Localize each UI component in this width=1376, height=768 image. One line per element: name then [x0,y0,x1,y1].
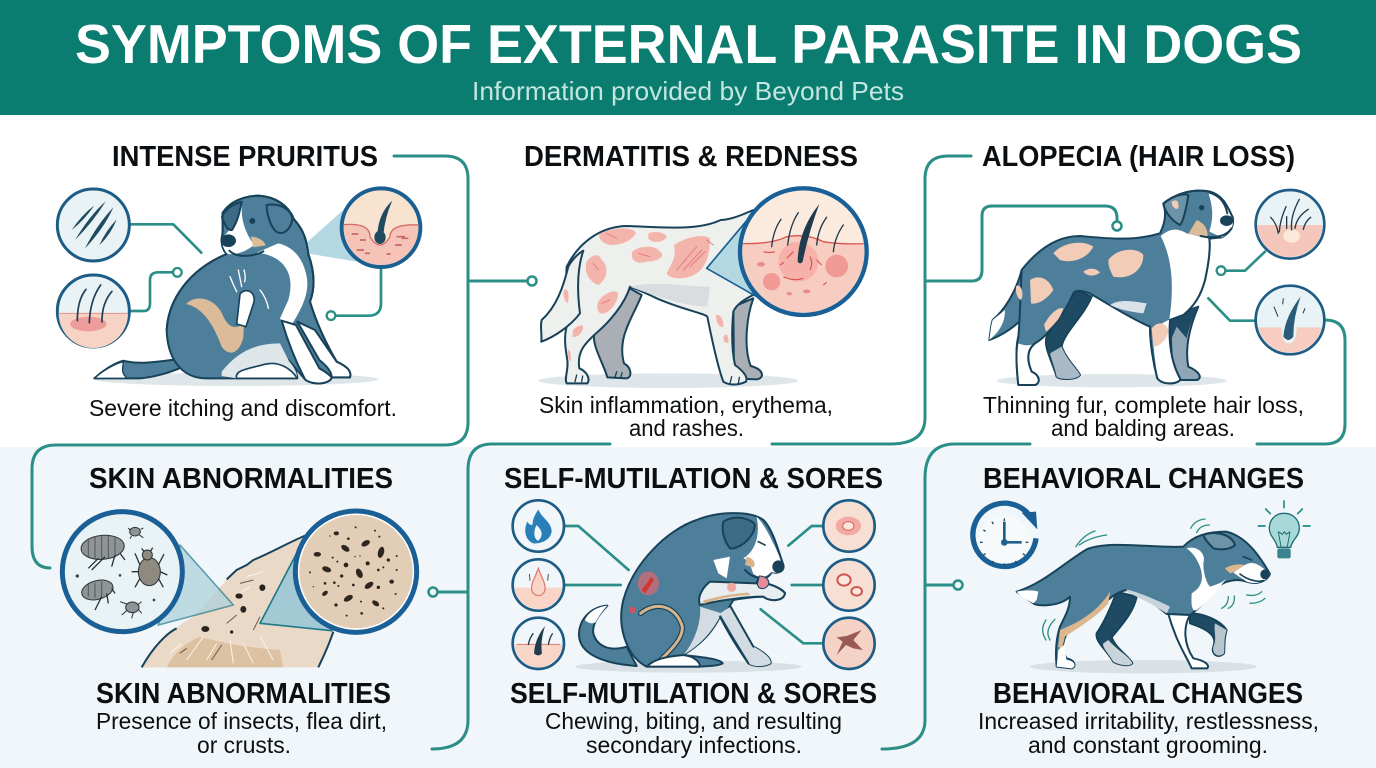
header banner [0,0,1376,115]
icon: open sores [823,559,875,611]
magnifier cone [707,217,757,297]
icon: inflamed follicles [57,275,129,348]
icon: single follicle [1253,286,1327,363]
subheading: SKIN ABNORMALITIES [96,678,391,710]
description: secondary infections. [586,732,802,758]
description: or crusts. [197,732,291,758]
subtitle: Information provided by Beyond Pets [472,76,904,106]
dog: standing with bald patches [989,191,1233,385]
description: Skin inflammation, erythema, [539,392,833,418]
description: Thinning fur, complete hair loss, [983,392,1304,418]
description: and constant grooming. [1028,732,1268,758]
subheading: BEHAVIORAL CHANGES [993,678,1303,710]
icon: scratch marks [57,189,129,261]
description: and balding areas. [1051,415,1235,441]
icon: red lesion [823,500,875,552]
dog: sitting and scratching [94,196,350,383]
panel: behavioral changes [973,463,1319,758]
illustration: chewing dog with icon callouts [513,500,875,673]
illustration: scratching dog with skin callouts [57,188,420,386]
heading: behavioral changes: BEHAVIORAL CHANGES [983,463,1304,495]
panel: intense pruritus [57,141,420,421]
description: and rashes. [629,415,744,441]
description: Chewing, biting, and resulting [545,708,842,734]
panel: alopecia [982,141,1327,441]
magnifier cones [158,545,233,625]
motion lines [1043,519,1265,640]
panel: dermatitis and redness [524,141,870,441]
title: SYMPTOMS OF EXTERNAL PARASITE IN DOGS [75,13,1302,75]
description [539,392,833,441]
shadow [575,661,802,673]
subheading: SELF-MUTILATION & SORES [510,678,877,710]
icon: clock [973,503,1037,569]
icon: fleas and mites [62,512,182,632]
illustration: dog with bald patches [989,190,1327,387]
shadow [95,373,378,386]
fur patch [142,535,333,667]
magnifier cone [297,208,357,262]
shadow [1030,660,1257,673]
icon: light bulb [1258,501,1310,558]
icon: fluid blister [513,559,564,611]
heading: self-mutilation: SELF-MUTILATION & SORES [504,463,883,495]
description [978,708,1319,758]
panel: self-mutilation and sores [504,463,883,758]
dog: chewing paw [579,513,785,667]
description: Severe itching and discomfort. [89,395,397,421]
icon: hair follicle closeup [340,188,420,270]
shadow [997,374,1227,387]
heading: dermatitis: DERMATITIS & REDNESS [524,141,858,173]
heading: alopecia: ALOPECIA (HAIR LOSS) [982,141,1295,173]
icon: thinning hair [1253,190,1327,262]
description: Presence of insects, flea dirt, [96,708,387,734]
dog: walking restlessly [1017,532,1270,668]
illustration: skin patch with parasites [62,511,417,667]
panel: skin abnormalities [62,463,417,758]
description [96,708,387,758]
connector lines between panels [32,156,1345,749]
shadow [538,373,798,388]
description [545,708,842,758]
dog: rash covered body [541,210,762,385]
heading: intense pruritus: INTENSE PRURITUS [112,141,378,173]
icon: flea dirt closeup [295,511,417,632]
icon: crusted wound [823,618,875,669]
illustration: dog with rashes and magnifier [538,188,870,388]
icon: hair follicle [513,618,564,669]
description [983,392,1304,441]
illustration: restless dog [973,501,1310,673]
lower background band [0,447,1376,768]
heading: skin abnormalities: SKIN ABNORMALITIES [89,463,393,495]
description: Increased irritability, restlessness, [978,708,1319,734]
icon: flame [513,500,564,552]
icon: inflamed skin closeup [737,188,870,317]
